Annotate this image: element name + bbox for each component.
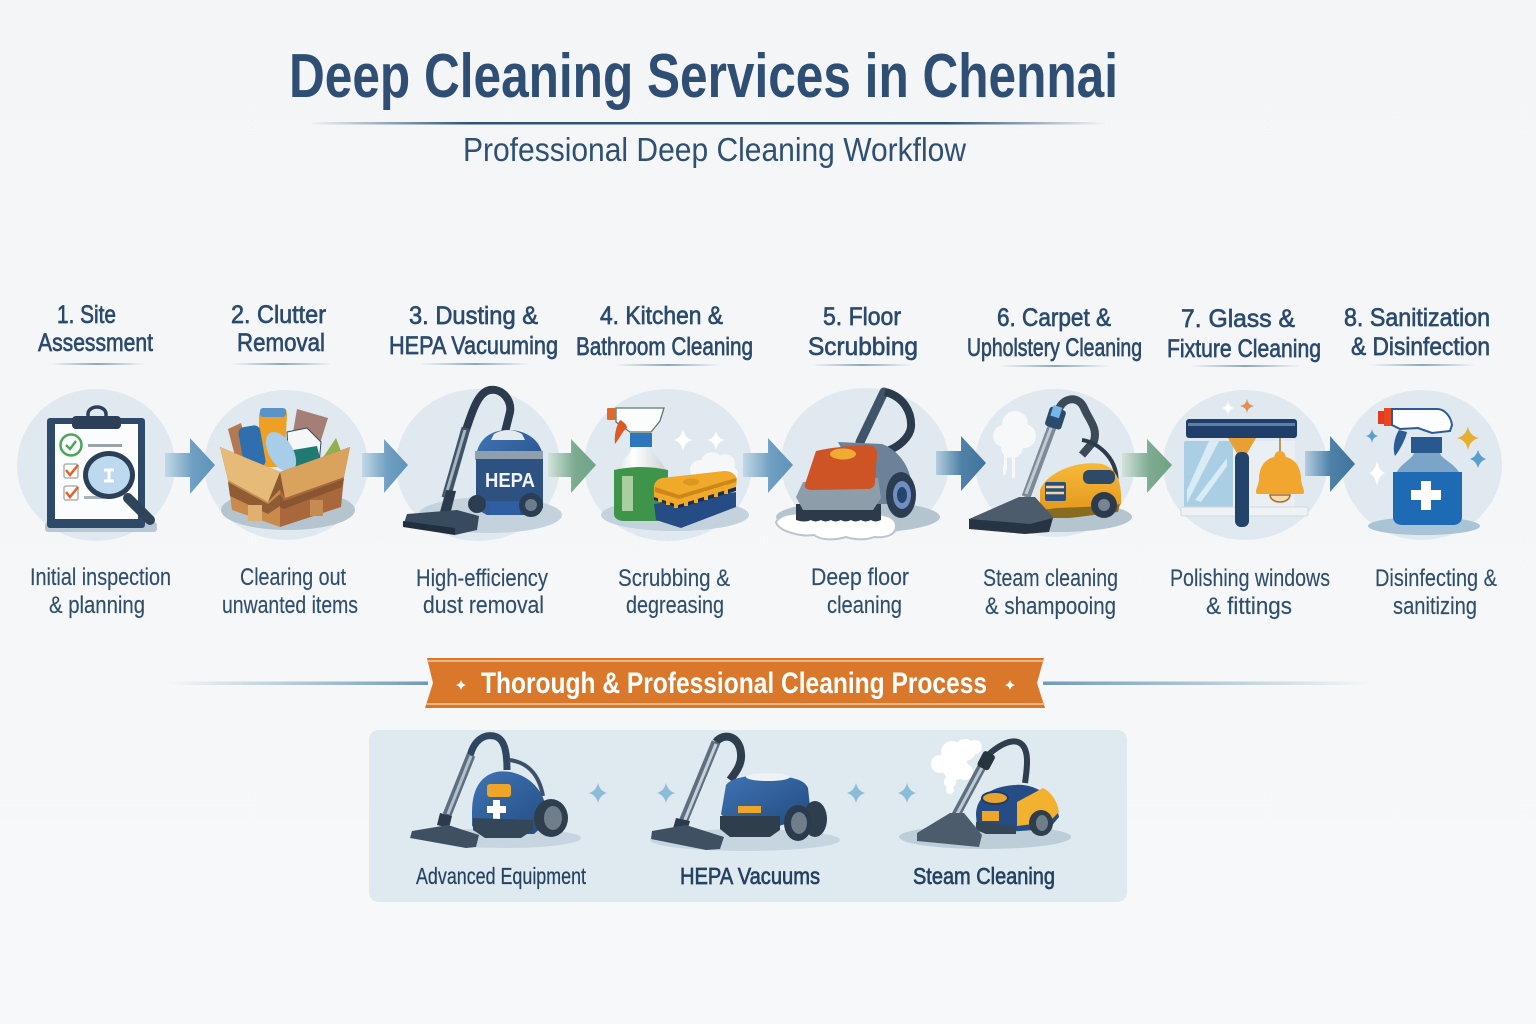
description 8: Disinfecting & <box>1375 565 1497 592</box>
arrow 5 to 6 <box>936 436 986 491</box>
step 6: carpet and upholstery cleaning <box>967 304 1142 537</box>
step 8 heading <box>1344 304 1490 366</box>
label: HEPA vacuums: HEPA Vacuums <box>680 863 820 889</box>
description 3: High-efficiency <box>416 565 548 592</box>
icon: spray bottle and sponge <box>584 389 752 541</box>
icon: HEPA vacuum <box>396 389 562 541</box>
step 4 heading <box>576 302 753 366</box>
description 6: Steam cleaning <box>983 565 1118 592</box>
description 3: dust removal <box>423 592 544 619</box>
arrow 1 to 2 <box>165 438 215 494</box>
step 7 heading: 7. Glass & <box>1181 305 1295 333</box>
step 7 heading <box>1167 305 1321 367</box>
step 1: site assessment <box>17 301 175 541</box>
icon: blue disinfectant spray <box>1342 390 1502 540</box>
arrow 4 to 5 <box>743 438 793 493</box>
description 5: cleaning <box>827 592 902 619</box>
step 5 heading: 5. Floor <box>823 303 901 331</box>
arrow 6 to 7 <box>1122 439 1172 493</box>
step 8 heading: & Disinfection <box>1351 333 1490 361</box>
icon: steam cleaning vacuum <box>899 739 1071 849</box>
description 2: unwanted items <box>222 592 358 619</box>
arrow 7 to 8 <box>1305 436 1355 492</box>
step 8: sanitization and disinfection <box>1342 304 1502 540</box>
description 1: & planning <box>49 592 145 619</box>
icon: squeegee, glass and bell lamp <box>1163 390 1327 540</box>
icon: cardboard box with items <box>204 390 368 540</box>
banner: thorough and professional cleaning process <box>170 658 1370 708</box>
step 6 heading <box>967 304 1142 367</box>
title: Deep Cleaning Services in Chennai <box>289 42 1118 111</box>
arrow 3 to 4 <box>548 439 596 493</box>
step 4 heading: Bathroom Cleaning <box>576 333 753 361</box>
step 3 heading: 3. Dusting & <box>409 302 538 330</box>
icon: advanced equipment vacuum <box>410 736 581 848</box>
step 2 heading: Removal <box>237 329 325 357</box>
step 1 heading: Assessment <box>38 329 153 357</box>
step 5 heading: Scrubbing <box>808 333 918 361</box>
step 2: clutter removal <box>204 301 368 540</box>
label: advanced equipment: Advanced Equipment <box>416 863 586 889</box>
description 7: & fittings <box>1206 593 1292 620</box>
step 1 heading: 1. Site <box>57 301 116 329</box>
description 1: Initial inspection <box>30 564 171 591</box>
step 3 heading: HEPA Vacuuming <box>389 332 558 360</box>
step descriptions <box>30 564 1497 620</box>
description 5: Deep floor <box>811 564 909 591</box>
description 7: Polishing windows <box>1170 565 1330 592</box>
step 4 heading: 4. Kitchen & <box>600 302 723 330</box>
banner: thorough and professional cleaning process: Thorough & Professional Cleaning Process <box>481 667 987 700</box>
arrow 2 to 3 <box>362 439 408 493</box>
icon: clipboard and magnifier <box>17 389 175 541</box>
description 4: degreasing <box>626 592 724 619</box>
sparkles between equipment <box>589 783 916 803</box>
icon: floor scrubber <box>776 388 949 539</box>
step 3 heading <box>389 302 558 365</box>
step 6 heading: 6. Carpet & <box>997 304 1111 332</box>
description 8: sanitizing <box>1393 593 1477 620</box>
description 4: Scrubbing & <box>618 565 730 592</box>
step 7: glass and fixture cleaning <box>1163 305 1327 540</box>
label: steam cleaning: Steam Cleaning <box>913 863 1055 889</box>
step 6 heading: Upholstery Cleaning <box>967 334 1142 362</box>
icon: HEPA vacuum <box>650 737 840 851</box>
step 8 heading: 8. Sanitization <box>1344 304 1490 332</box>
step 4: kitchen and bathroom cleaning <box>576 302 753 541</box>
step 3: dusting and HEPA vacuuming <box>389 302 562 541</box>
step 2 heading: 2. Clutter <box>231 301 326 329</box>
step 7 heading: Fixture Cleaning <box>1167 335 1321 363</box>
step 2 heading <box>231 301 332 365</box>
subtitle: Professional Deep Cleaning Workflow <box>463 131 966 168</box>
icon: HEPA vacuum: HEPA <box>485 470 535 492</box>
icon: steam carpet cleaner <box>969 389 1135 537</box>
step 5 heading <box>808 303 918 366</box>
step 5: floor scrubbing <box>776 303 949 539</box>
description 6: & shampooing <box>985 593 1116 620</box>
panel: equipment <box>369 730 1127 902</box>
description 2: Clearing out <box>240 564 346 591</box>
step 1 heading <box>38 301 153 365</box>
